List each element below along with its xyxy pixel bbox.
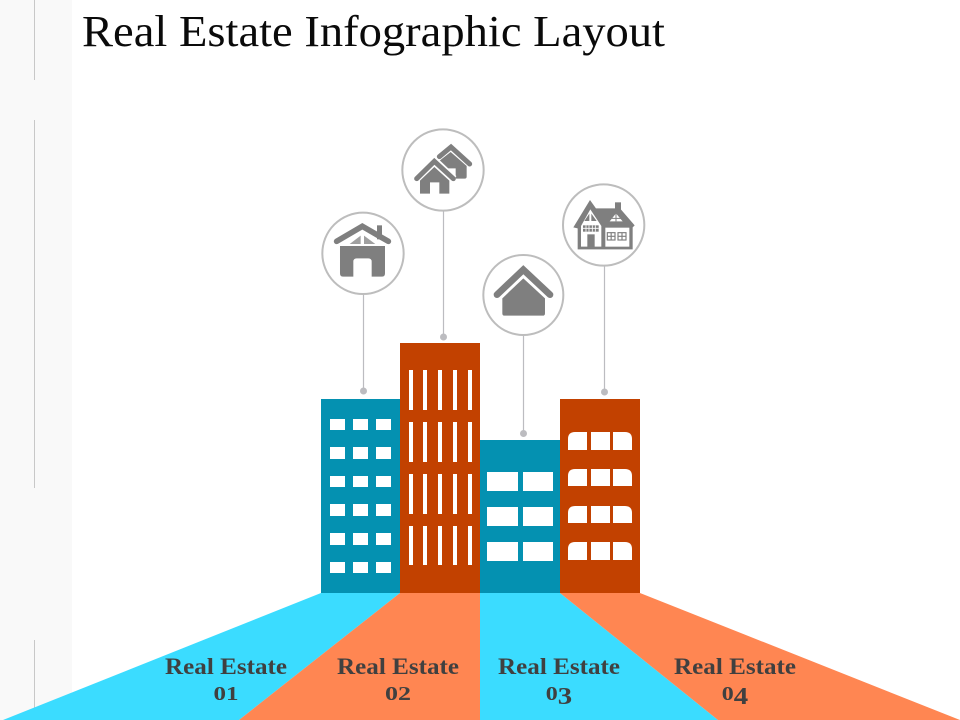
- label 4: Real Estate: [674, 654, 796, 679]
- label 3: Real Estate: [498, 654, 620, 679]
- building 2: [400, 343, 480, 593]
- label 2: [337, 654, 459, 705]
- connector 2: [440, 211, 447, 340]
- label 4: 0: [722, 682, 734, 705]
- icon 4: detailed cottage: [563, 184, 644, 266]
- label 3: 0: [546, 682, 558, 705]
- label 1: Real Estate: [165, 654, 287, 679]
- icon 3: simple house: [483, 255, 563, 335]
- building 3: [480, 440, 560, 593]
- label 1: [165, 654, 287, 704]
- label 3: [498, 654, 620, 709]
- label 2: Real Estate: [337, 654, 459, 679]
- label 1: 01: [214, 682, 238, 704]
- building 1: [321, 399, 400, 593]
- connector 3: [520, 336, 527, 437]
- title: Real Estate Infographic Layout: [82, 7, 665, 56]
- label 4: [674, 654, 796, 709]
- connector 1: [360, 294, 367, 394]
- icon 1: house with chimney: [322, 213, 404, 294]
- label 2: 02: [385, 683, 411, 705]
- floor beams: [3, 593, 960, 720]
- connector 4: [601, 266, 608, 396]
- building 4: [560, 399, 640, 593]
- label 4: 4: [734, 682, 748, 709]
- icon 2: two houses: [402, 129, 484, 211]
- label 3: 3: [558, 682, 572, 709]
